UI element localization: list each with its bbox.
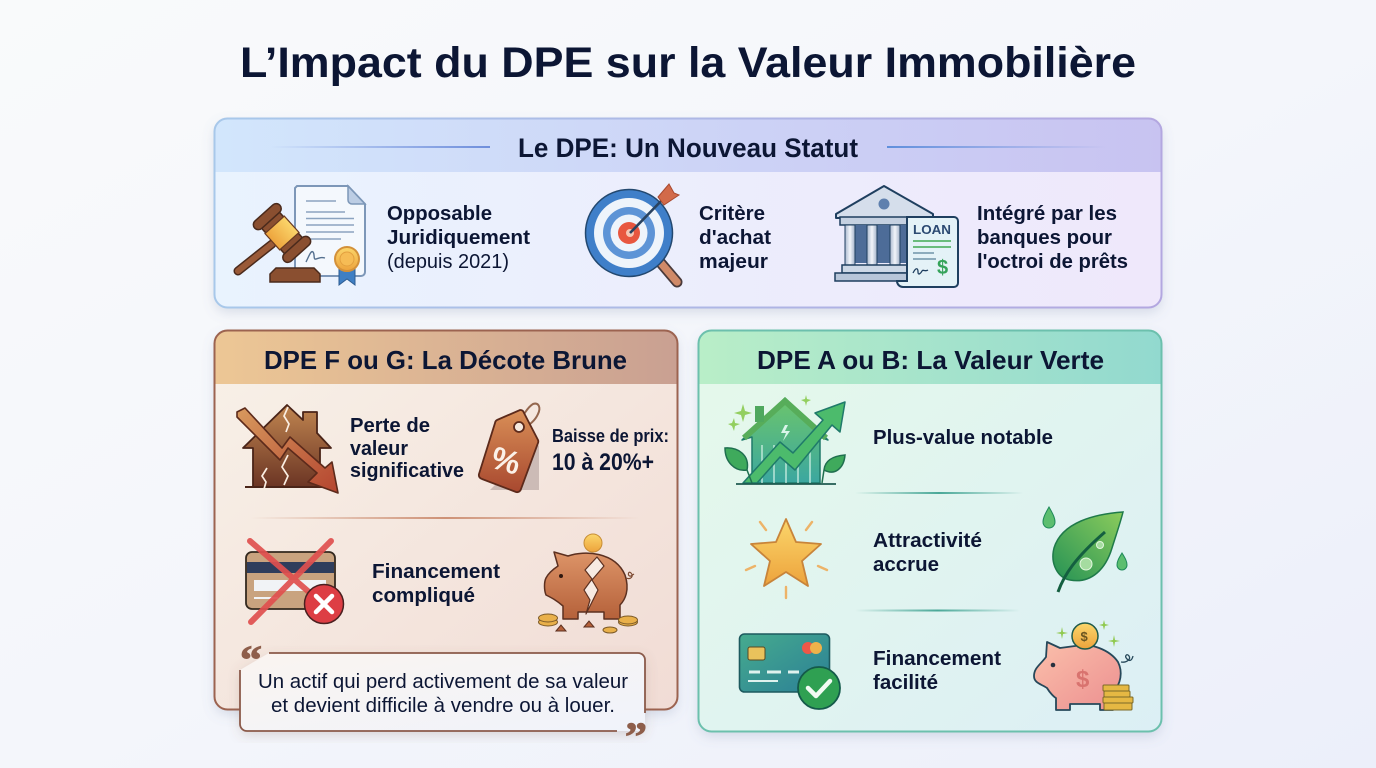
panel: DPE A ou B xyxy=(698,330,1162,732)
callout: quote xyxy=(240,637,647,759)
text: perte de valeur: valeur xyxy=(350,438,408,460)
icon: pink piggy bank with coins xyxy=(1034,620,1133,710)
icon: bank and loan document xyxy=(835,186,958,287)
icon: leaf with droplets xyxy=(1043,507,1127,592)
panel: DPE F ou G xyxy=(214,330,678,710)
text: financement compliqué: compliqué xyxy=(372,585,475,607)
panel: Le DPE, un nouveau statut xyxy=(214,118,1162,308)
text: quote body xyxy=(258,671,628,717)
icon: gavel and document xyxy=(238,186,365,285)
text: opposable juridiquement: Opposable xyxy=(387,203,492,225)
text: attractivité accrue xyxy=(873,530,982,576)
text: plus-value notable: Plus-value notable xyxy=(873,427,1053,449)
text: financement facilité: facilité xyxy=(873,672,938,694)
text: financement facilité xyxy=(873,648,1001,694)
text: critère d'achat majeur: d'achat xyxy=(699,227,771,249)
heading: Le DPE: Le DPE: Un Nouveau Statut xyxy=(518,133,858,163)
icon: pink piggy bank with coins: $ xyxy=(1076,666,1090,693)
text: quote body: Un actif qui perd activement de sa valeur xyxy=(258,671,628,693)
icon: green house with rising arrow xyxy=(725,395,845,484)
icon: price tag: % xyxy=(487,439,525,482)
heading: décote brune: DPE F ou G: La Décote Brune xyxy=(264,345,627,375)
text: opposable juridiquement: (depuis 2021) xyxy=(387,251,509,273)
text: critère d'achat majeur: Critère xyxy=(699,203,765,225)
icon: bank and loan document: LOAN xyxy=(913,223,951,237)
text: attractivité accrue: Attractivité xyxy=(873,530,982,552)
text: opposable juridiquement: Juridiquement xyxy=(387,227,530,249)
icon: crossed-out card xyxy=(246,541,344,624)
icon: target with arrow xyxy=(586,184,679,282)
text: critère d'achat majeur: majeur xyxy=(699,251,768,273)
text: attractivité accrue: accrue xyxy=(873,554,939,576)
text: intégré par les banques: l'octroi de prêts xyxy=(977,251,1128,273)
text: baisse de prix: 10 à 20%+ xyxy=(552,449,654,476)
title: L’Impact du DPE sur la Valeur Immobilière xyxy=(240,39,1136,87)
icon: price tag xyxy=(479,404,539,492)
text: intégré par les banques: Intégré par les xyxy=(977,203,1117,225)
icon: opening quote mark: “ xyxy=(240,637,262,682)
icon: pink piggy bank with coins: $ xyxy=(1080,629,1088,644)
text: financement compliqué: Financement xyxy=(372,561,500,583)
text: critère d'achat majeur xyxy=(699,203,771,273)
icon: falling house xyxy=(237,405,338,493)
text: intégré par les banques xyxy=(977,203,1128,273)
text: intégré par les banques: banques pour xyxy=(977,227,1112,249)
text: quote body: et devient difficile à vendre ou à louer. xyxy=(271,695,615,717)
icon: closing quote mark: ” xyxy=(625,714,647,759)
text: financement compliqué xyxy=(372,561,500,607)
icon: credit card with check xyxy=(740,634,840,709)
text: perte de valeur: significative xyxy=(350,460,464,482)
text: baisse de prix: Baisse de prix: xyxy=(552,426,669,446)
text: perte de valeur xyxy=(350,415,464,482)
text: financement facilité: Financement xyxy=(873,648,1001,670)
icon: star xyxy=(746,519,827,598)
text: perte de valeur: Perte de xyxy=(350,415,430,437)
text: baisse de prix xyxy=(552,426,669,476)
icon: bank and loan document: $ xyxy=(937,257,948,279)
heading: valeur verte: DPE A ou B: La Valeur Verte xyxy=(757,345,1104,375)
text: opposable juridiquement xyxy=(387,203,530,273)
icon: broken piggy bank xyxy=(538,534,638,633)
